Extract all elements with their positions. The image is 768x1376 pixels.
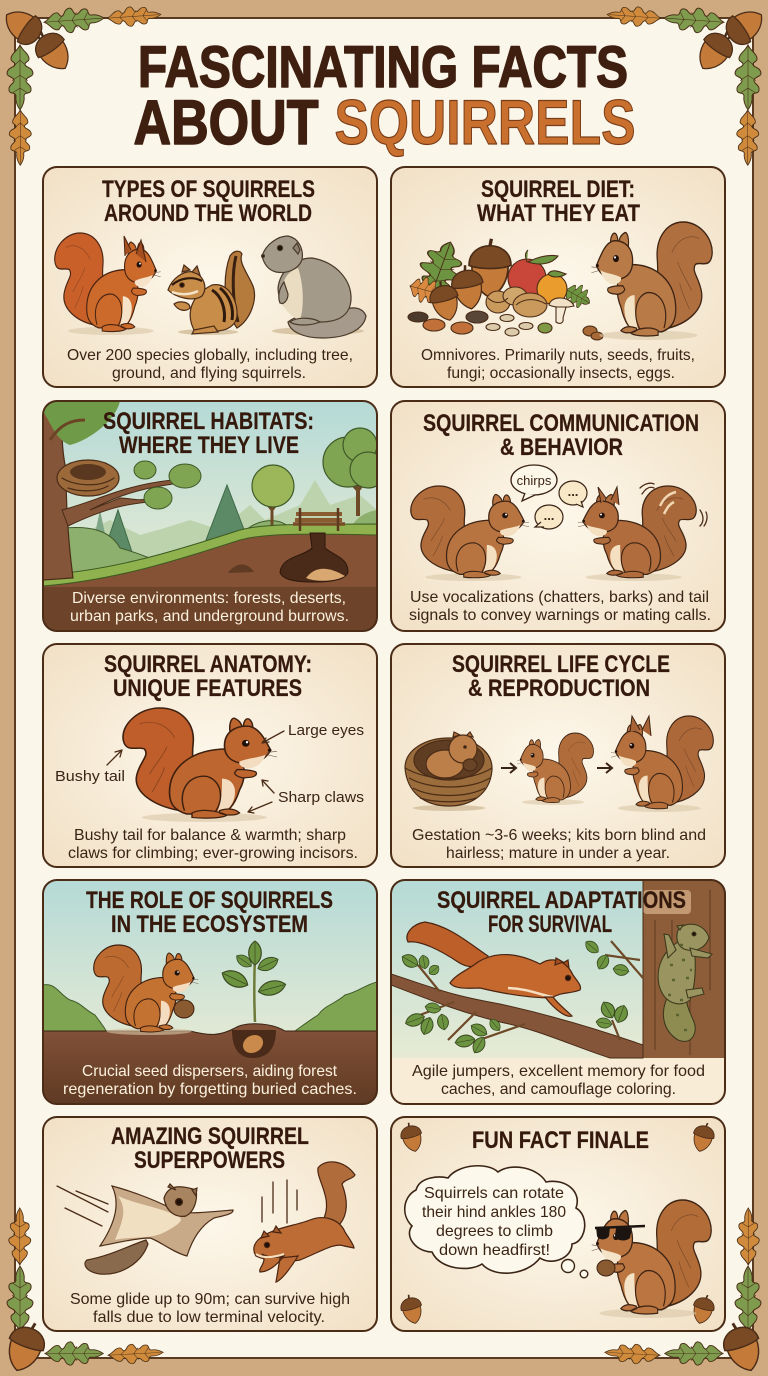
speech bubble: dots left: ... — [544, 508, 554, 523]
illustration: camouflaged squirrel — [658, 924, 712, 1041]
heading: anatomy — [104, 651, 312, 702]
label: large eyes: Large eyes — [288, 722, 364, 739]
heading: diet: SQUIRREL DIET: — [481, 176, 635, 203]
speech bubble: dots right — [559, 481, 587, 507]
bubble text: their hind ankles 180 — [422, 1204, 566, 1221]
heading: communication: & BEHAVIOR — [500, 434, 623, 461]
description: adaptations: caches, and camouflage coloring. — [441, 1081, 676, 1098]
label: bushy tail: Bushy tail — [55, 768, 125, 785]
speech bubble: dots left — [535, 505, 563, 529]
illustration: nest with baby — [405, 732, 492, 811]
heading: anatomy: UNIQUE FEATURES — [113, 675, 302, 702]
description: anatomy: claws for climbing; ever-growing incisors. — [68, 845, 358, 862]
description: anatomy: Bushy tail for balance & warmth; sharp — [74, 827, 346, 844]
scene: soil, bushes and sapling — [43, 941, 377, 1104]
label: bushy tail — [55, 750, 125, 785]
heading: superpowers: AMAZING SQUIRREL — [111, 1123, 309, 1150]
illustration: food pile — [407, 235, 603, 340]
description: habitats: urban parks, and underground burrows. — [70, 608, 349, 625]
heading: life cycle: & REPRODUCTION — [468, 675, 650, 702]
corner decoration: bottom right — [604, 1208, 768, 1376]
illustration: squirrel burying nut — [94, 945, 198, 1035]
speech bubble: dots right: ... — [568, 484, 578, 499]
description: life cycle: Gestation ~3-6 weeks; kits born blind and — [412, 827, 706, 844]
heading: communication: SQUIRREL COMMUNICATION — [423, 410, 699, 437]
illustration: right squirrel — [578, 483, 707, 581]
description: types: Over 200 species globally, including tree, — [67, 347, 353, 364]
scene: tree and branches — [391, 880, 725, 1104]
description: habitats: Diverse environments: forests, deserts, — [72, 590, 346, 607]
label: sharp claws: Sharp claws — [278, 789, 364, 806]
description: superpowers: falls due to low terminal velocity. — [93, 1309, 325, 1326]
description: life cycle: hairless; mature in under a year. — [446, 845, 670, 862]
heading: types: AROUND THE WORLD — [104, 200, 312, 227]
description: ecosystem — [63, 1063, 357, 1098]
description: communication: Use vocalizations (chatters, barks) and tail — [410, 589, 709, 606]
heading: ecosystem — [86, 887, 333, 938]
description: life cycle — [412, 827, 706, 862]
panel: fun fact finale — [391, 1117, 725, 1331]
bubble text: down headfirst! — [439, 1242, 550, 1259]
panel: superpowers — [43, 1117, 377, 1331]
illustration: squirrel with sunglasses — [592, 1200, 711, 1318]
title: ABOUT — [134, 88, 318, 158]
description: adaptations: Agile jumpers, excellent memory for food — [412, 1063, 705, 1080]
heading: types: TYPES OF SQUIRRELS — [102, 176, 315, 203]
arrow: nest to young — [501, 763, 516, 773]
illustration: adult squirrel — [611, 716, 713, 812]
description: anatomy — [68, 827, 358, 862]
bubble text — [422, 1185, 566, 1259]
heading: superpowers — [111, 1123, 309, 1174]
description: ecosystem: Crucial seed dispersers, aiding forest — [82, 1063, 338, 1080]
heading: communication — [423, 410, 699, 461]
speech bubble: chirps: chirps — [517, 473, 552, 488]
corner decoration: bottom left — [0, 1208, 164, 1376]
description: diet: fungi; occasionally insects, eggs. — [447, 365, 675, 382]
heading: fun fact: FUN FACT FINALE — [472, 1127, 649, 1154]
heading: habitats — [103, 408, 314, 459]
speech bubble: chirps — [511, 465, 557, 501]
illustration: left squirrel — [411, 486, 529, 581]
heading: life cycle: SQUIRREL LIFE CYCLE — [452, 651, 670, 678]
illustration: gray ground squirrel — [262, 236, 366, 338]
title — [134, 35, 636, 158]
bubble text: Squirrels can rotate — [424, 1185, 564, 1202]
illustration: chipmunk — [168, 251, 255, 335]
corner decoration: top right — [606, 2, 768, 165]
heading: adaptations — [437, 887, 686, 938]
arrow: young to adult — [597, 763, 612, 773]
illustration: red squirrel — [55, 233, 161, 335]
acorn icons in corners — [398, 1120, 717, 1326]
description: superpowers: Some glide up to 90m; can survive high — [70, 1291, 350, 1308]
description: superpowers — [70, 1291, 350, 1326]
illustration: leaping squirrel — [407, 922, 581, 1016]
heading: adaptations: SQUIRREL ADAPTATIONS — [437, 887, 686, 914]
description: communication: signals to convey warnings or mating calls. — [409, 607, 711, 624]
panel: squirrel diet — [391, 167, 725, 387]
panel: communication — [391, 401, 725, 631]
description: types — [67, 347, 353, 382]
description: ecosystem: regeneration by forgetting buried caches. — [63, 1081, 357, 1098]
corner decoration: top left — [0, 2, 162, 165]
scene: forest and burrow — [43, 401, 386, 631]
panel: habitats — [43, 401, 386, 631]
description: habitats — [70, 590, 349, 625]
heading: types — [102, 176, 315, 227]
panel: life cycle — [391, 644, 725, 867]
panel: anatomy — [43, 644, 377, 867]
thought bubble — [405, 1166, 588, 1278]
label: sharp claws — [248, 780, 364, 813]
heading: habitats: WHERE THEY LIVE — [119, 432, 299, 459]
heading: diet — [477, 176, 640, 227]
label: large eyes — [262, 722, 364, 743]
heading: ecosystem: THE ROLE OF SQUIRRELS — [86, 887, 333, 914]
panel: ecosystem — [43, 880, 377, 1104]
illustration: brown squirrel eating — [591, 222, 712, 340]
description: diet — [421, 347, 695, 382]
heading: ecosystem: IN THE ECOSYSTEM — [111, 911, 308, 938]
illustration: anatomy squirrel — [123, 708, 277, 822]
heading: adaptations: FOR SURVIVAL — [488, 911, 612, 938]
description: adaptations — [412, 1063, 705, 1098]
title: FASCINATING FACTS — [138, 35, 628, 100]
illustration: falling squirrel — [254, 1162, 355, 1282]
bubble text: degrees to climb — [436, 1223, 553, 1240]
heading: anatomy: SQUIRREL ANATOMY: — [104, 651, 312, 678]
heading: habitats: SQUIRREL HABITATS: — [103, 408, 314, 435]
panel: types of squirrels — [43, 167, 377, 387]
heading: diet: WHAT THEY EAT — [477, 200, 640, 227]
heading: superpowers: SUPERPOWERS — [134, 1147, 285, 1174]
illustration: flying squirrel — [57, 1184, 233, 1274]
title: SQUIRRELS — [334, 88, 636, 158]
heading: life cycle — [452, 651, 670, 702]
illustration: young squirrel — [517, 733, 593, 805]
description: communication — [409, 589, 711, 624]
description: types: ground, and flying squirrels. — [112, 365, 306, 382]
description: diet: Omnivores. Primarily nuts, seeds, fruits, — [421, 347, 695, 364]
panel: adaptations — [391, 880, 725, 1104]
